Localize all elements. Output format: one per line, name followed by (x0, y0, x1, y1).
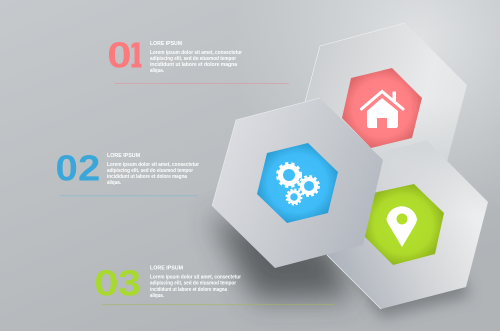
icon panel: green hexagon (363, 184, 444, 265)
divider 02 (60, 194, 198, 197)
item 01 (109, 41, 289, 84)
text block 02: adipiscing elit, sed do eiusmod tempor (107, 168, 193, 174)
text block 03 (150, 274, 241, 299)
cast shadow under hexagons (210, 215, 352, 300)
text block 02: aliqua. (107, 180, 122, 186)
icon panel: red hexagon (342, 68, 422, 148)
icon: house (362, 92, 403, 128)
text block 02: incididunt ut labore et dolore magna (107, 174, 187, 180)
text block 03: incididunt ut labore et dolore magna (150, 287, 227, 293)
hexagon: left (212, 98, 383, 268)
heading 03: LORE IPSUM (150, 266, 183, 272)
icon: gears (277, 163, 319, 205)
item 02 (56, 148, 199, 196)
number 01 (109, 42, 142, 68)
text block 02: Lorem ipsum dolor sit amet, consectetur (107, 162, 199, 168)
hexagon: top (298, 23, 467, 190)
heading 02: LORE IPSUM (107, 153, 140, 159)
number 02: 0 (56, 148, 78, 189)
number 01: 1 (126, 34, 146, 76)
number 02: 2 (78, 148, 100, 189)
divider 01 (115, 82, 289, 85)
text block 03: aliqua. (150, 293, 165, 299)
number 02 (56, 148, 100, 189)
number 03: 3 (118, 264, 141, 304)
icon panel: blue hexagon (257, 143, 338, 223)
hexagon: bottom (319, 140, 488, 309)
number 01: 0 (107, 35, 132, 76)
number 03 (94, 263, 141, 304)
icon: map pin (386, 206, 417, 247)
number 03: 0 (94, 263, 119, 304)
text block 01: incididunt ut labore et dolore magna (150, 62, 237, 68)
text block 01: Lorem ipsum dolor sit amet, consectetur (150, 50, 242, 56)
text block 02 (107, 162, 199, 186)
heading 01: LORE IPSUM (150, 41, 182, 47)
shadow under bottom hexagon (350, 270, 470, 318)
text block 01: adipiscing elit, sed do eiusmod tempor (150, 56, 236, 62)
text block 01: aliqua. (150, 68, 165, 74)
text block 03: Lorem ipsum dolor sit amet, consectetur (150, 274, 241, 280)
item 03 (94, 263, 335, 305)
text block 01 (150, 50, 242, 74)
divider 03 (102, 303, 335, 306)
text block 03: adipiscing elit, sed do eiusmod tempor (150, 281, 236, 287)
